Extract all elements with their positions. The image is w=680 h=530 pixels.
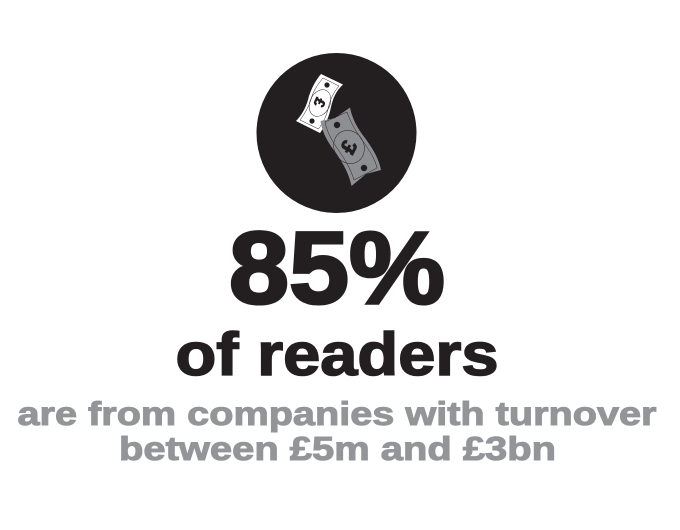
description line 2: between £5m and £3bn	[119, 430, 556, 467]
icon: white pound note	[296, 74, 343, 133]
black circle	[256, 53, 416, 213]
icon: grey pound note	[320, 108, 381, 186]
text block: description	[18, 395, 657, 467]
icon: grey pound note: £	[337, 136, 362, 158]
icon: banknotes in black circle	[256, 53, 416, 213]
big statistic: 85%	[229, 211, 445, 325]
icon: white pound note: £	[309, 95, 329, 110]
heading: of readers: of readers	[176, 321, 498, 388]
description line 1: are from companies with turnover	[18, 395, 657, 432]
